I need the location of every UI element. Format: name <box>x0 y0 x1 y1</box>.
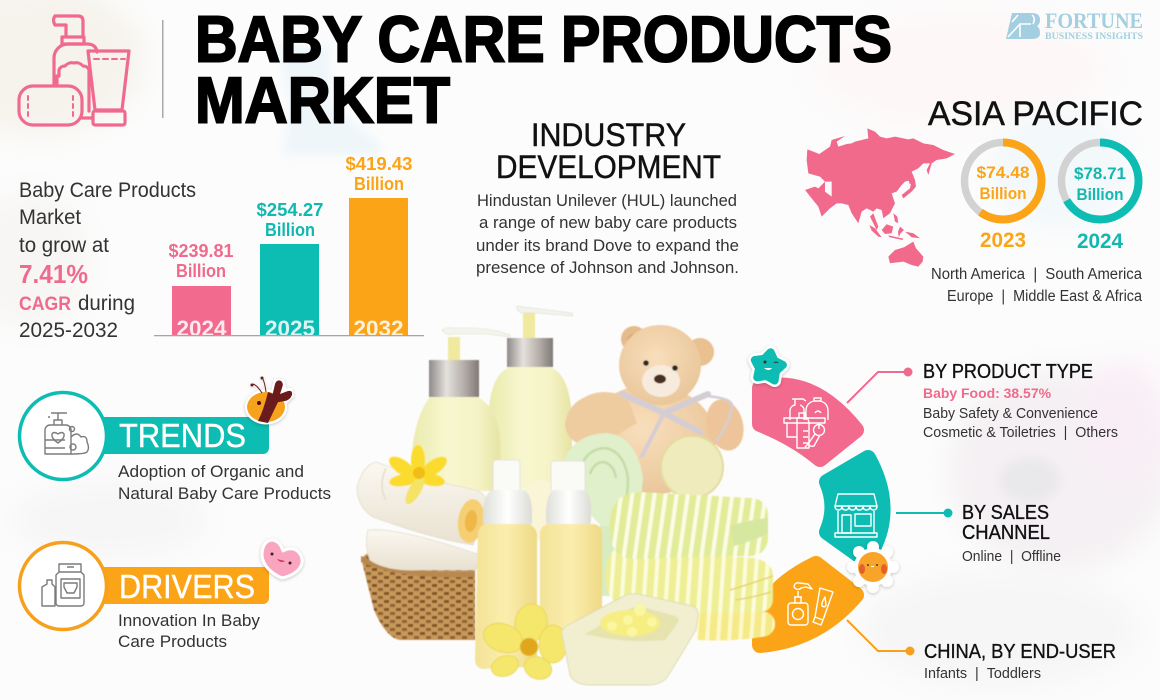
sponge behind front bottles <box>518 480 562 540</box>
bar: 2025: Billion <box>265 220 315 240</box>
divider <box>162 20 164 118</box>
bar: 2025: $254.27 <box>256 200 324 220</box>
trends text: Natural Baby Care Products <box>118 484 331 503</box>
hero photo: baby care products <box>357 306 775 685</box>
green towel roll <box>562 433 643 596</box>
trends circle icon <box>20 392 106 480</box>
bar: 2024 <box>168 241 234 341</box>
by product type text: Baby Food: 38.57% <box>923 385 1052 401</box>
by sales channel text: Online | Offline <box>962 549 1061 565</box>
industry development text: presence of Johnson and Johnson. <box>476 259 739 277</box>
drivers text: Innovation In Baby <box>118 611 260 630</box>
bar: 2024: Billion <box>176 261 226 281</box>
front left bottle <box>475 460 537 669</box>
market growth text: to grow at <box>19 234 109 257</box>
teddy bear <box>565 325 749 495</box>
by sales channel text: CHANNEL <box>962 522 1050 544</box>
sticker: heart <box>262 540 302 578</box>
trends label: TRENDS <box>119 417 246 454</box>
title: BABY CARE PRODUCTS <box>195 2 892 76</box>
trends text <box>118 462 331 503</box>
map: Asia Pacific <box>805 128 955 267</box>
by product type text: Cosmetic & Toiletries | Others <box>923 425 1118 441</box>
woven tray <box>562 594 698 685</box>
drivers circle icon <box>20 542 106 630</box>
market growth text: during <box>78 292 135 315</box>
trends band <box>100 417 269 454</box>
logo: Fortune Business Insights: BUSINESS INSIGHTS <box>1045 32 1143 42</box>
other regions: Europe | Middle East & Africa <box>947 288 1142 305</box>
industry development heading <box>496 117 721 185</box>
trends block <box>20 376 331 503</box>
connector: product type <box>847 368 912 403</box>
other regions <box>931 266 1142 305</box>
wicker basket <box>361 548 475 640</box>
sticker: bee <box>245 376 294 424</box>
other regions: North America | South America <box>931 266 1142 283</box>
drivers text: Care Products <box>118 632 227 651</box>
donut: 2024: Billion <box>1076 185 1124 204</box>
bar: 2025 <box>256 200 324 341</box>
market growth text <box>19 179 196 342</box>
donut: 2023: 2023 <box>980 229 1026 252</box>
back left bottle <box>410 328 510 491</box>
bar chart <box>154 154 424 341</box>
front right bottle <box>540 461 602 632</box>
logo: Fortune Business Insights <box>1006 8 1143 42</box>
drivers text <box>118 611 260 651</box>
market growth text: 2025-2032 <box>19 319 118 342</box>
donut: 2023: $74.48 <box>976 163 1030 182</box>
bar: 2024: 2024 <box>176 316 227 341</box>
sticker: star <box>755 352 783 380</box>
china by end-user text: Infants | Toddlers <box>924 666 1041 682</box>
drivers band <box>100 567 269 604</box>
back right bottle <box>488 306 573 489</box>
connector: sales channel <box>896 510 952 516</box>
bar: 2024: $239.81 <box>168 241 234 261</box>
donut: 2024: 2024 <box>1077 230 1123 253</box>
industry development text: under its brand Dove to expand the <box>476 237 739 255</box>
china by end-user text: CHINA, BY END-USER <box>924 641 1116 663</box>
industry development heading: DEVELOPMENT <box>496 149 721 185</box>
title <box>195 2 892 136</box>
bar: 2025: 2025 <box>265 316 315 341</box>
bar: 2032 <box>346 154 412 341</box>
donut: 2024: $78.71 <box>1074 164 1126 183</box>
icon: lotion and tube <box>788 583 833 625</box>
donut: 2023 <box>964 142 1042 252</box>
logo: Fortune Business Insights: FORTUNE <box>1045 8 1143 33</box>
bar: 2032: 2032 <box>354 316 404 341</box>
by product type text: BY PRODUCT TYPE <box>923 361 1093 383</box>
by product type text <box>923 361 1118 441</box>
icon: baby care products <box>19 16 129 125</box>
market growth text: Market <box>19 206 81 229</box>
petal: end-user <box>760 564 856 645</box>
market growth text: 7.41% <box>19 259 88 289</box>
industry development text: Hindustan Unilever (HUL) launched <box>477 192 737 210</box>
trends text: Adoption of Organic and <box>118 462 304 481</box>
by product type text: Baby Safety & Convenience <box>923 406 1098 422</box>
market growth text: Baby Care Products <box>19 179 196 202</box>
title: MARKET <box>195 64 450 136</box>
yellow flower <box>479 602 567 683</box>
icon: storefront <box>835 494 877 537</box>
pom-pom ball <box>661 436 723 498</box>
market growth text: CAGR <box>19 294 71 315</box>
petal: sales channel <box>827 458 883 560</box>
white towels <box>357 462 488 570</box>
industry development text: a range of new baby care products <box>479 214 737 232</box>
bar: 2032: Billion <box>354 174 404 194</box>
Asia Pacific heading: ASIA PACIFIC <box>928 95 1143 133</box>
drivers block <box>20 540 302 651</box>
sticker: sun <box>847 541 899 593</box>
bar: 2032: $419.43 <box>346 154 412 174</box>
striped folded towels <box>606 492 775 640</box>
donut: 2023: Billion <box>980 184 1026 203</box>
industry development heading: INDUSTRY <box>531 117 686 153</box>
donut: 2024 <box>1062 142 1138 253</box>
by sales channel text: BY SALES <box>962 502 1049 524</box>
yellow daisy <box>386 445 450 507</box>
industry development text <box>476 192 739 277</box>
connector: end-user <box>847 620 914 654</box>
drivers label: DRIVERS <box>119 568 255 605</box>
petal: product type <box>760 386 856 459</box>
by sales channel text <box>962 502 1061 565</box>
icon: basket of baby products <box>784 398 828 448</box>
china by end-user text <box>924 641 1116 682</box>
